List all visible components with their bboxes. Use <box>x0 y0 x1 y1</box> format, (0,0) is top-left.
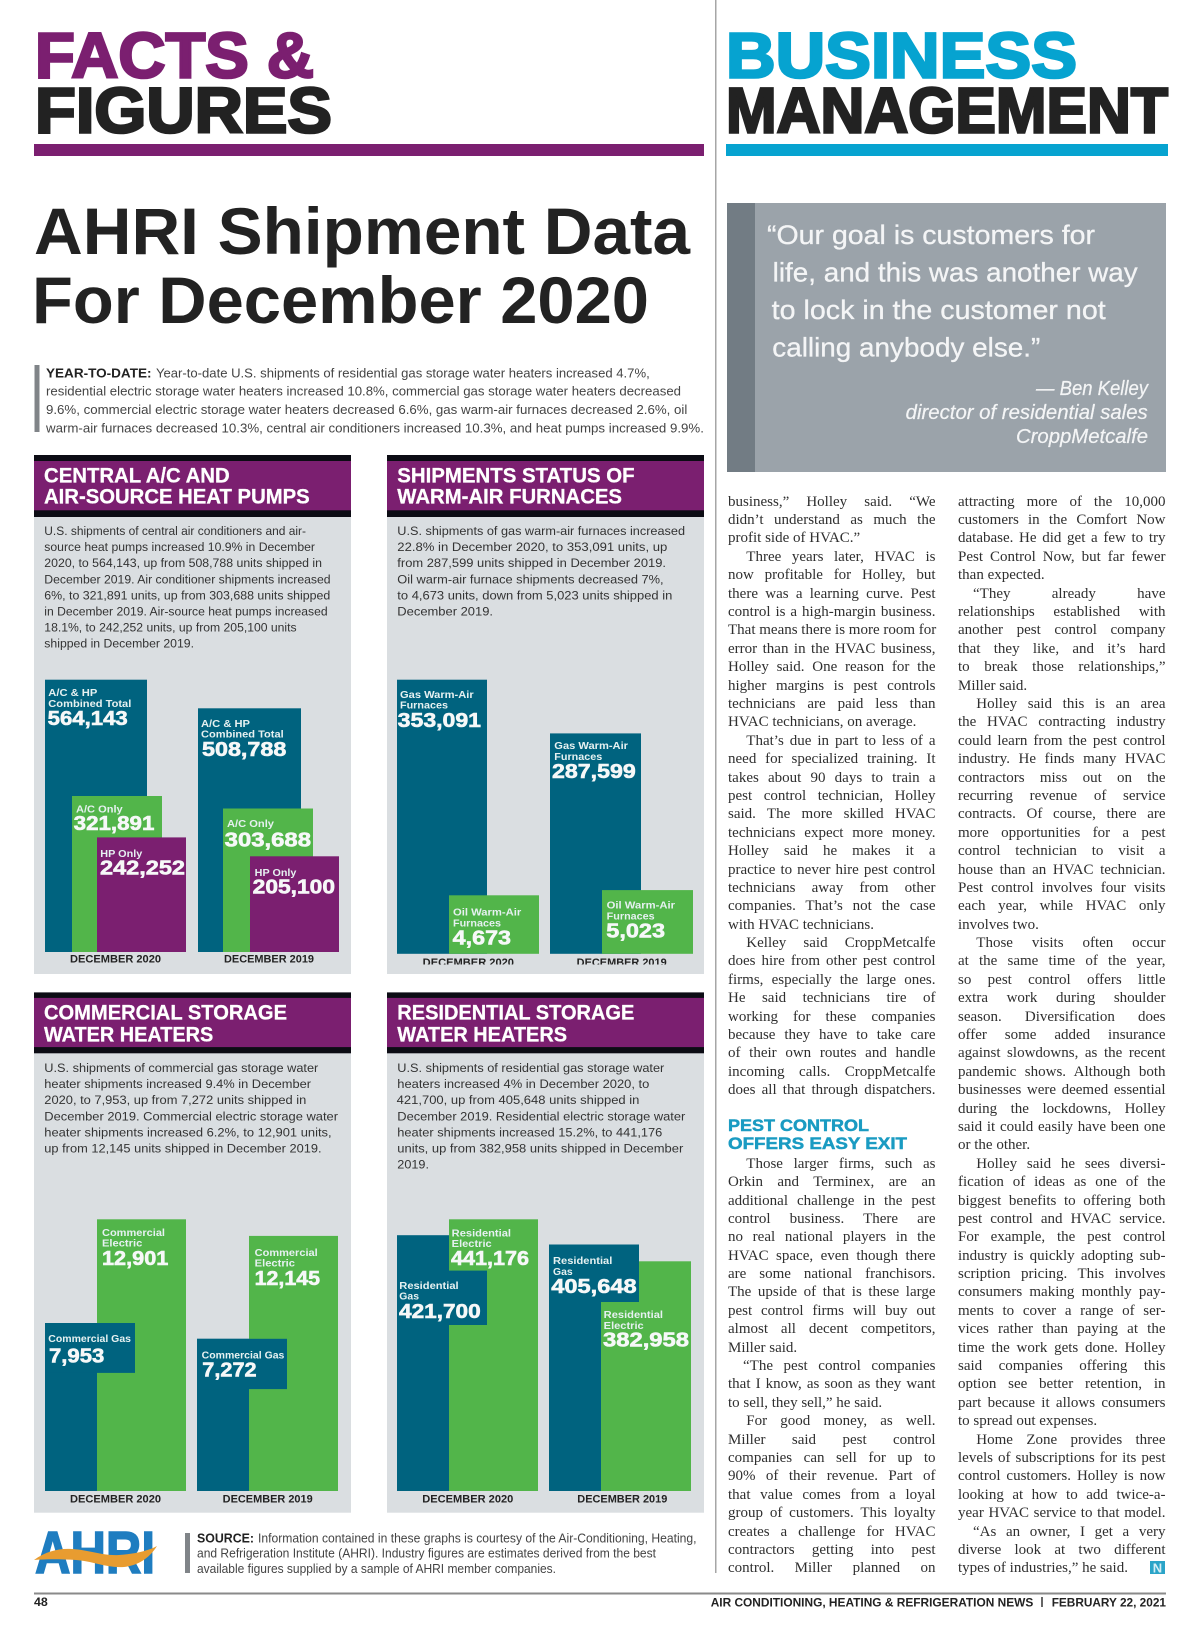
article column 1: business,” Holley said. “We <box>728 494 936 510</box>
article column 1: incoming calls. CroppMetcalfe <box>728 1064 936 1080</box>
panel heading: RESIDENTIAL STORAGE <box>397 1001 634 1025</box>
article column 1: working for these companies <box>728 1009 936 1025</box>
bar chart: commercial December 2019 <box>197 1236 338 1505</box>
article column 2: pest control and HVAC service. <box>958 1211 1166 1227</box>
article column 2: Holley said he sees diversi- <box>976 1156 1166 1172</box>
bar chart: A/C and HP December 2019: A/C & HP <box>201 719 250 730</box>
panel description: December 2019. Air conditioner shipments increased <box>44 572 331 586</box>
panel description: up from 12,145 units shipped in December 2019. <box>44 1142 322 1156</box>
panel heading <box>34 455 351 517</box>
article column 2: or the other. <box>958 1137 1030 1153</box>
bar chart: commercial December 2020: DECEMBER 2020 <box>70 1493 161 1505</box>
icon: end mark: N <box>1153 1560 1162 1575</box>
bar chart: A/C and HP December 2020: 564,143 <box>48 708 128 730</box>
article column 1: group of customers. This loyalty <box>728 1505 936 1521</box>
page footer: FEBRUARY 22, 2021 <box>1052 1596 1166 1610</box>
bar chart: residential December 2020: 441,176 <box>451 1248 529 1270</box>
bar chart: residential December 2020: Residential <box>399 1281 459 1292</box>
bar chart: furnaces December 2019: Furnaces <box>607 911 655 922</box>
panel description: December 2019. <box>397 604 493 618</box>
bar chart: residential December 2020: DECEMBER 2020 <box>422 1493 513 1505</box>
article column 2: Those visits often occur <box>976 935 1166 951</box>
page footer: 48 <box>34 1595 48 1609</box>
bar chart: residential December 2020: 421,700 <box>399 1301 481 1323</box>
article column 2: diverse look at two different <box>958 1542 1166 1558</box>
bar chart: A/C and HP December 2020: HP Only <box>100 849 143 860</box>
source note <box>185 1531 696 1576</box>
panel: warm-air furnaces <box>387 455 704 974</box>
article column 2: another pest control company <box>958 622 1166 638</box>
panel description: U.S. shipments of gas warm-air furnaces increased <box>397 524 685 538</box>
article column 1: companies. That’s not the case <box>728 898 936 914</box>
panel description: December 2019. Commercial electric storage water <box>44 1109 338 1123</box>
panel description <box>44 1061 338 1156</box>
article column 1: companies can sell for up to <box>728 1450 936 1466</box>
panel heading <box>387 455 704 517</box>
bar chart: residential December 2019: 405,648 <box>551 1276 637 1298</box>
panel description: December 2019. Residential electric storage water <box>397 1109 685 1123</box>
bar chart: residential December 2019: Gas <box>553 1267 573 1278</box>
bar chart: commercial December 2020: Electric <box>102 1238 143 1250</box>
article column 2: Pest control involves four visits <box>958 880 1166 896</box>
panel heading: AIR-SOURCE HEAT PUMPS <box>44 485 310 509</box>
article column 1: higher margins is pest controls <box>728 678 936 694</box>
panel description <box>397 1061 685 1172</box>
article column 1: pest control firms will buy out <box>728 1303 936 1319</box>
article column 2: For example, the pest control <box>958 1229 1166 1245</box>
panel: commercial storage water heaters <box>34 992 351 1513</box>
article column 2: “They already have <box>973 586 1166 602</box>
bar chart: A/C and HP December 2019: 508,788 <box>202 739 286 761</box>
bar chart: furnaces December 2020: Furnaces <box>453 919 501 930</box>
article column 1: pest control technician, Holley <box>728 788 936 804</box>
article column 2: recurring revenue of service <box>958 788 1166 804</box>
masthead: business management <box>726 20 1168 156</box>
article column 2: house than an HVAC technician. <box>958 862 1166 878</box>
column divider line <box>715 0 716 1573</box>
bar chart: residential December 2020: Gas <box>399 1292 419 1303</box>
article column 1 <box>728 494 936 1576</box>
panel description: 6%, to 321,891 units, up from 303,688 units shipped <box>44 588 330 602</box>
article column 2: levels of subscriptions for its pest <box>958 1450 1166 1466</box>
page footer: AIR CONDITIONING, HEATING & REFRIGERATION NEWS <box>711 1596 1033 1610</box>
bar chart: furnaces December 2020: Oil Warm-Air <box>453 908 521 919</box>
article column 1: are some national franchisors. <box>728 1266 936 1282</box>
panel description: heater shipments increased 15.2%, to 441,176 <box>397 1125 662 1139</box>
article column 1: control is a high-margin business. <box>728 604 936 620</box>
article column 2: scription pricing. This involves <box>958 1266 1166 1282</box>
panel: central A/C and heat pumps <box>34 455 351 974</box>
bar chart: furnaces December 2020: Furnaces <box>400 701 448 712</box>
year-to-date summary: Year-to-date U.S. shipments of residential gas storage water heaters increased 4.7%, <box>156 365 650 380</box>
bar chart: A/C and HP December 2020: A/C Only <box>76 804 123 815</box>
article column 1: He said technicians tire of <box>728 990 936 1006</box>
article column 2: could learn from the pest control <box>958 733 1166 749</box>
article column 2: part because it allows consumers <box>958 1395 1166 1411</box>
icon: end mark <box>1150 1560 1165 1575</box>
article column 1: Holley said. One reason for the <box>728 659 936 675</box>
quote attribution: director of residential sales <box>906 402 1148 424</box>
panel heading: WATER HEATERS <box>44 1022 213 1046</box>
article column 1: need for specialized training. It <box>728 751 936 767</box>
article column 2: option see better retention, in <box>958 1376 1166 1392</box>
article column 2: Miller said. <box>958 678 1027 694</box>
article column 2: more opportunities for a pest <box>958 825 1166 841</box>
article column 2: said companies offering this <box>958 1358 1166 1374</box>
bar chart: furnaces December 2019: Furnaces <box>554 752 603 763</box>
pull quote <box>727 203 1166 472</box>
article column 2: industry. He finds many HVAC <box>958 751 1166 767</box>
article column 1: 90% of their revenue. Part of <box>728 1468 936 1484</box>
article column 2: “As an owner, I get a very <box>973 1524 1166 1540</box>
main title: For December 2020 <box>32 263 649 337</box>
panel heading: CENTRAL A/C AND <box>44 464 230 488</box>
article column 1: profit side of HVAC.” <box>728 530 860 546</box>
section heading: pest control: OFFERS EASY EXIT <box>728 1134 908 1153</box>
bar chart: A/C and HP December 2020: A/C & HP <box>48 688 97 699</box>
bar chart: furnaces December 2019: DECEMBER 2019 <box>577 957 667 969</box>
panel heading: COMMERCIAL STORAGE <box>44 1001 287 1025</box>
bar chart: commercial December 2019: Commercial Gas <box>202 1350 285 1361</box>
article column 2 <box>958 494 1166 1576</box>
bar chart: furnaces December 2019: Gas Warm-Air <box>554 741 628 752</box>
article column 2: extra work during shoulder <box>958 990 1166 1006</box>
article column 1: That means there is more room for <box>728 622 936 638</box>
bar chart: A/C and HP December 2019: 205,100 <box>253 876 335 898</box>
bar chart: furnaces December 2019: 5,023 <box>606 920 665 942</box>
article column 2: so pest control offers little <box>958 972 1166 988</box>
article column 1: HVAC technicians, on average. <box>728 714 916 730</box>
bar chart: commercial December 2020: 12,901 <box>102 1248 168 1270</box>
bar chart: furnaces December 2020: Gas Warm-Air <box>400 690 474 701</box>
panel heading <box>387 992 704 1053</box>
article column 2: fication of ideas as one of the <box>958 1174 1166 1190</box>
bar chart: A/C and HP December 2020: 242,252 <box>100 858 185 880</box>
article column 1: now profitable for Holley, but <box>728 567 936 583</box>
bar chart: residential December 2020: Residential <box>452 1228 511 1240</box>
panel description: heater shipments increased 9.4% in December <box>44 1077 311 1091</box>
article column 2: contractors miss out on the <box>958 770 1166 786</box>
panel description: from 287,599 units shipped in December 2019. <box>397 556 666 570</box>
panel description <box>44 524 331 651</box>
bar chart: furnaces December 2020 <box>397 680 539 969</box>
panel description: 18.1%, to 242,252 units, up from 205,100 units <box>44 621 297 635</box>
article column 2: involves two. <box>958 917 1039 933</box>
article column 2: Holley said this is an area <box>976 696 1166 712</box>
article column 2: pandemic shows. Although both <box>958 1064 1166 1080</box>
panel description: heater shipments increased 6.2%, to 12,901 units, <box>44 1125 332 1139</box>
bar chart: commercial December 2019: 12,145 <box>255 1268 320 1290</box>
panel heading <box>34 992 351 1053</box>
main title <box>32 194 691 337</box>
article column 2: biggest benefits to offering both <box>958 1193 1166 1209</box>
article column 2: that they like, and it’s hard <box>958 641 1166 657</box>
icon: AHRI logo: AHRI <box>35 1520 155 1586</box>
article column 1: practice to never hire pest control <box>728 862 936 878</box>
article column 1: Those larger firms, such as <box>746 1156 936 1172</box>
article column 1: does all that through dispatchers. <box>728 1082 936 1098</box>
article column 1: to sell, they sell,” he said. <box>728 1395 882 1411</box>
section heading: pest control: PEST CONTROL <box>728 1116 869 1135</box>
article column 1: because they have to take care <box>728 1027 936 1043</box>
article column 2: database. He did get a few to try <box>958 530 1166 546</box>
article column 2: than expected. <box>958 567 1045 583</box>
article column 1: “The pest control companies <box>743 1358 936 1374</box>
bar chart: commercial December 2019: Electric <box>255 1258 295 1270</box>
article column 2: attracting more of the 10,000 <box>958 494 1166 510</box>
bar chart: commercial December 2019: 7,272 <box>202 1360 257 1382</box>
bar chart: furnaces December 2020: 4,673 <box>453 928 511 950</box>
bar chart: A/C and HP December 2020: DECEMBER 2020 <box>70 954 161 966</box>
panel description: shipped in December 2019. <box>44 637 194 651</box>
article column 1: error than in the HVAC business, <box>728 641 936 657</box>
article column 2: at the same time of the year, <box>958 953 1166 969</box>
bar chart: commercial December 2020 <box>45 1219 186 1505</box>
bar chart: furnaces December 2020: DECEMBER 2020 <box>423 957 514 969</box>
year-to-date summary: 9.6%, commercial electric storage water heaters decreased 6.6%, gas warm-air furnaces decreased 2.6%, oil <box>46 402 687 417</box>
quote attribution <box>906 378 1149 448</box>
bar chart: A/C and HP December 2020: 321,891 <box>74 813 154 835</box>
bar chart: residential December 2020 <box>397 1219 538 1505</box>
pull quote: “Our goal is customers for <box>767 220 1095 250</box>
article column 2: vices rather than paying at the <box>958 1321 1166 1337</box>
panel description: units, up from 382,958 units shipped in December <box>397 1142 683 1156</box>
quote attribution: — Ben Kelley <box>1035 378 1149 400</box>
article column 1: technicians away from other <box>728 880 936 896</box>
masthead: business management: MANAGEMENT <box>726 74 1168 146</box>
quote attribution: CroppMetcalfe <box>1016 426 1148 448</box>
panel description: to 4,673 units, down from 5,023 units shipped in <box>397 588 672 602</box>
panel description: source heat pumps increased 10.9% in December <box>44 540 315 554</box>
year-to-date summary: warm-air furnaces decreased 10.3%, central air conditioners increased 10.3%, and heat pumps increased 9.9%. <box>45 420 704 435</box>
article column 1: takes about 90 days to train a <box>728 770 936 786</box>
bar chart: residential December 2019: Residential <box>553 1256 612 1267</box>
year-to-date summary <box>34 365 704 435</box>
article column 1: Holley said he makes it a <box>728 843 936 859</box>
panel heading: WARM-AIR FURNACES <box>397 485 622 509</box>
article column 1: Three years later, HVAC is <box>746 549 936 565</box>
article column 1: For good money, as well. <box>746 1413 936 1429</box>
article column 2: time the work gets done. Holley <box>958 1340 1166 1356</box>
article column 1: said. The more skilled HVAC <box>728 806 936 822</box>
article column 2: offer some added insurance <box>958 1027 1166 1043</box>
article column 2: against slowdowns, as the recent <box>958 1045 1166 1061</box>
masthead: facts and figures: FIGURES <box>35 74 332 146</box>
bar chart: residential December 2019: DECEMBER 2019 <box>577 1493 667 1505</box>
article column 1: there was a learning curve. Pest <box>728 586 936 602</box>
panel description: U.S. shipments of residential gas storage water <box>397 1061 664 1075</box>
article column 1: Orkin and Terminex, are an <box>728 1174 936 1190</box>
bar chart: furnaces December 2019 <box>550 733 693 969</box>
article column 1: control. Miller planned on <box>728 1560 936 1576</box>
article column 2: the HVAC contracting industry <box>958 714 1166 730</box>
article column 2: control customers. Holley is now <box>958 1468 1166 1484</box>
pull quote: calling anybody else.” <box>772 333 1040 363</box>
masthead: facts and figures: FACTS & <box>35 20 314 92</box>
source note: Information contained in these graphs is courtesy of the Air-Conditioning, Heating, <box>258 1531 696 1546</box>
article column 1: HVAC space, even though there <box>728 1248 936 1264</box>
pull quote: to lock in the customer not <box>772 295 1106 325</box>
bar chart: residential December 2020: Electric <box>452 1239 492 1250</box>
panel description: U.S. shipments of central air conditioners and air- <box>44 524 306 538</box>
article column 2: to spread out expenses. <box>958 1413 1097 1429</box>
article column 2: looking at how to add twice-a- <box>958 1487 1166 1503</box>
article column 1: technicians are paid less than <box>728 696 936 712</box>
article column 1: Miller said pest control <box>728 1432 936 1448</box>
article column 2: relationships established with <box>958 604 1166 620</box>
bar chart: furnaces December 2019: Oil Warm-Air <box>607 900 675 911</box>
article column 2: consumers making monthly pay- <box>958 1284 1166 1300</box>
bar chart: A/C and HP December 2019: A/C Only <box>227 819 274 830</box>
year-to-date summary: residential electric storage water heaters increased 10.8%, commercial gas storage water heaters decreased <box>46 384 681 399</box>
panel description <box>397 524 685 618</box>
main title: AHRI Shipment Data <box>34 194 691 268</box>
article column 1: that I know, as soon as they want <box>728 1376 936 1392</box>
panel description: 22.8% in December 2020, to 353,091 units, up <box>397 540 667 554</box>
bar chart: A/C and HP December 2019: Combined Total <box>201 730 284 740</box>
article column 1: no real national players in the <box>728 1229 936 1245</box>
article column 2: each year, while HVAC only <box>958 898 1166 914</box>
bar chart: commercial December 2019: DECEMBER 2019 <box>223 1493 313 1505</box>
article column 1: additional challenge in the pest <box>728 1193 936 1209</box>
article column 1: Miller said. <box>728 1340 797 1356</box>
panel heading: WATER HEATERS <box>397 1022 567 1046</box>
article column 2: during the lockdowns, Holley <box>958 1101 1166 1117</box>
panel: residential storage water heaters <box>387 992 704 1513</box>
section heading: pest control <box>728 1116 908 1153</box>
bar chart: residential December 2019: 382,958 <box>603 1330 689 1352</box>
panel description: Oil warm-air furnace shipments decreased 7%, <box>397 572 664 586</box>
source note: available figures supplied by a sample of AHRI member companies. <box>197 1561 556 1576</box>
bar chart: commercial December 2020: Commercial Gas <box>48 1334 131 1345</box>
bar chart: residential December 2019: Residential <box>604 1310 663 1321</box>
bar chart: A/C and HP December 2019: DECEMBER 2019 <box>224 954 314 966</box>
panel description: 421,700, up from 405,648 units shipped in <box>397 1093 640 1107</box>
masthead: business management: BUSINESS <box>726 20 1077 92</box>
article column 2: businesses were deemed essential <box>958 1082 1166 1098</box>
article column 1: with HVAC technicians. <box>728 917 874 933</box>
panel description: 2020, to 7,953, up from 7,272 units shipped in <box>44 1093 306 1107</box>
panel description: U.S. shipments of commercial gas storage water <box>44 1061 318 1075</box>
source note: SOURCE: <box>197 1531 254 1546</box>
bar chart: commercial December 2020: 7,953 <box>49 1346 104 1368</box>
panel heading: SHIPMENTS STATUS OF <box>397 464 635 488</box>
bar chart: residential December 2019 <box>549 1244 691 1505</box>
bar chart: A/C and HP December 2020: Combined Total <box>48 699 131 710</box>
bar chart: commercial December 2020: Commercial <box>102 1228 165 1239</box>
page footer <box>34 1592 1166 1610</box>
article column 2: types of industries,” he said. <box>958 1560 1128 1576</box>
bar chart: residential December 2019: Electric <box>604 1321 644 1332</box>
article column 2: Pest Control Now, but far fewer <box>958 549 1166 565</box>
article column 2: ments to cover a range of ser- <box>958 1303 1166 1319</box>
article column 2: control technician to visit a <box>958 843 1166 859</box>
article column 1: control business. There are <box>728 1211 936 1227</box>
masthead: facts and figures <box>34 20 704 156</box>
bar chart: A/C and HP December 2019: HP Only <box>255 868 297 879</box>
article column 1: of their own routes and handle <box>728 1045 936 1061</box>
article column 2: year HVAC service to that model. <box>958 1505 1166 1521</box>
article column 1: technicians expect more money. <box>728 825 936 841</box>
article column 2: season. Diversification does <box>958 1009 1166 1025</box>
bar chart: furnaces December 2019: 287,599 <box>552 761 636 783</box>
article column 2: Home Zone provides three <box>976 1432 1166 1448</box>
article column 1: firms, especially the large ones. <box>728 972 936 988</box>
source note: and Refrigeration Institute (AHRI). Industry figures are estimates derived from the best <box>197 1546 656 1561</box>
article column 1: Kelley said CroppMetcalfe <box>746 935 936 951</box>
panel description: in December 2019. Air-source heat pumps increased <box>44 604 328 618</box>
article column 1: The upside of that is these large <box>728 1284 936 1300</box>
bar chart: A/C and HP December 2019: 303,688 <box>225 830 311 852</box>
article column 1: contractors getting into pest <box>728 1542 936 1558</box>
article column 2: customers in the Comfort Now <box>958 512 1166 528</box>
bar chart: A/C and HP December 2020 <box>45 680 186 966</box>
panel description: 2020, to 564,143, up from 508,788 units shipped in <box>44 556 322 570</box>
article column 1: didn’t understand as much the <box>728 512 936 528</box>
article column 2: industry is quickly adopting sub- <box>958 1248 1166 1264</box>
article column 1: almost all decent competitors, <box>728 1321 936 1337</box>
panel description: heaters increased 4% in December 2020, to <box>397 1077 649 1091</box>
panel description: 2019. <box>397 1158 429 1172</box>
article column 2: to break those relationships,” <box>958 659 1166 675</box>
article column 2: contracts. Of course, there are <box>958 806 1166 822</box>
bar chart: furnaces December 2020: 353,091 <box>398 710 481 732</box>
bar chart: A/C and HP December 2019 <box>198 708 339 966</box>
article column 1: creates a challenge for HVAC <box>728 1524 936 1540</box>
article column 1: That’s due in part to less of a <box>746 733 936 749</box>
pull quote: life, and this was another way <box>773 258 1138 288</box>
article column 2: said it could easily have been one <box>958 1119 1166 1135</box>
article column 1: does hire from other pest control <box>728 953 936 969</box>
article column 1: that value comes from a loyal <box>728 1487 936 1503</box>
bar chart: commercial December 2019: Commercial <box>255 1248 318 1259</box>
year-to-date summary: YEAR-TO-DATE: <box>46 365 152 380</box>
